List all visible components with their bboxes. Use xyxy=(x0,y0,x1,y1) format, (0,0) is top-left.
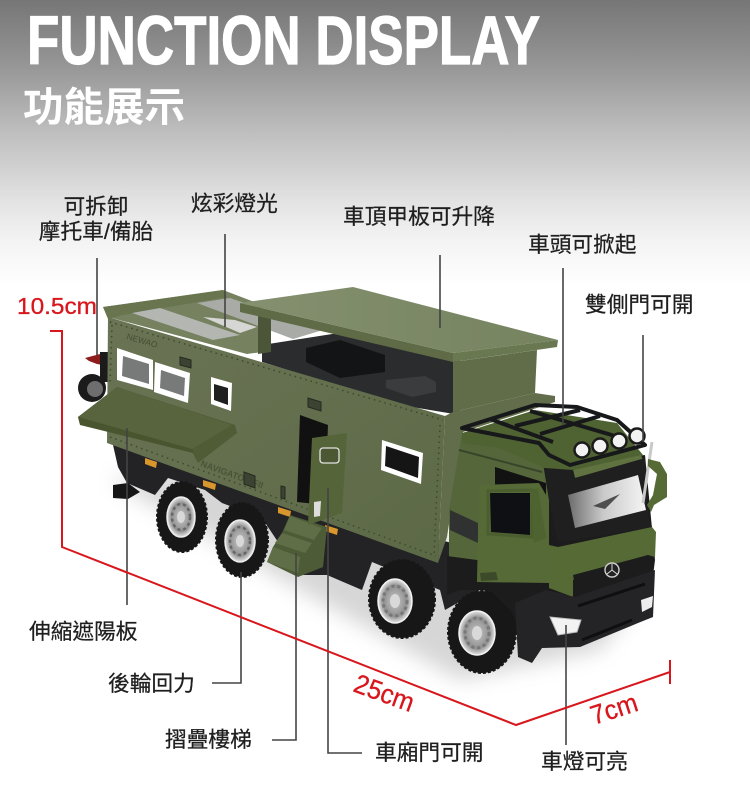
wheels xyxy=(157,482,516,673)
rivet lines xyxy=(110,322,443,556)
wheel xyxy=(216,503,268,577)
side mirror xyxy=(643,442,667,512)
callout: cabin door: 車廂門可開 xyxy=(375,740,483,765)
callout: sunshade: 伸縮遮陽板 xyxy=(29,619,138,644)
roof rack xyxy=(462,405,645,465)
brand text: NEWAO xyxy=(125,331,159,350)
callout labels xyxy=(29,191,693,774)
folding stairs xyxy=(267,515,327,577)
callout: roof deck: 車頂甲板可升降 xyxy=(343,204,495,229)
wheel xyxy=(369,560,435,638)
interior of raised roof xyxy=(262,332,460,415)
rear roof surface xyxy=(103,290,262,354)
raised roof support post xyxy=(258,313,271,354)
brand star xyxy=(605,563,619,577)
box side panel xyxy=(107,317,445,563)
dimension lines xyxy=(50,331,670,725)
width label: 7cm xyxy=(587,687,642,731)
ground shadow xyxy=(110,470,640,680)
cab wheel arch xyxy=(447,556,522,630)
model text: NAVIGATOR-FII xyxy=(199,458,265,490)
callout: side doors: 雙側門可開 xyxy=(585,292,693,317)
orange markers xyxy=(145,458,338,535)
subtitle: 功能展示 xyxy=(23,84,185,130)
length label: 25cm xyxy=(350,668,418,718)
callout: spare motorcycle: 可拆卸 xyxy=(63,194,129,219)
box front and top lip xyxy=(438,393,555,563)
wheel xyxy=(448,591,516,673)
motorcycle spare xyxy=(78,352,110,402)
open side door xyxy=(308,433,347,525)
headlight xyxy=(550,617,581,635)
roof lights xyxy=(574,428,644,458)
callout: folding stairs: 摺疊樓梯 xyxy=(165,727,252,752)
callout: lights: 炫彩燈光 xyxy=(191,191,278,216)
wheel xyxy=(157,482,207,552)
cab backing xyxy=(470,440,655,640)
truck model xyxy=(78,287,667,673)
solar panels xyxy=(132,298,323,340)
leader lines xyxy=(97,234,643,753)
callout: headlights: 車燈可亮 xyxy=(541,749,628,774)
open cab door xyxy=(477,483,549,583)
raised roof panel xyxy=(240,287,558,412)
sunshade canopy xyxy=(78,387,237,463)
grille xyxy=(573,555,653,597)
windshield xyxy=(568,475,646,528)
right light xyxy=(641,596,653,612)
chassis xyxy=(113,445,545,610)
cab nose xyxy=(549,527,656,597)
title: FUNCTION DISPLAY xyxy=(27,2,540,79)
windshield surround xyxy=(545,458,652,543)
small vents xyxy=(180,357,321,499)
callout: pull-back wheels: 後輪回力 xyxy=(108,671,195,696)
rear bar xyxy=(113,483,140,499)
callout: cab tilt: 車頭可掀起 xyxy=(528,232,637,257)
bumper xyxy=(515,570,655,663)
cab roof and hood xyxy=(462,410,643,478)
callout: spare motorcycle line 2: 摩托車/備胎 xyxy=(39,219,153,244)
cab side xyxy=(449,433,549,583)
door opening xyxy=(297,415,328,505)
height label: 10.5cm xyxy=(17,293,97,319)
windows xyxy=(117,348,423,484)
